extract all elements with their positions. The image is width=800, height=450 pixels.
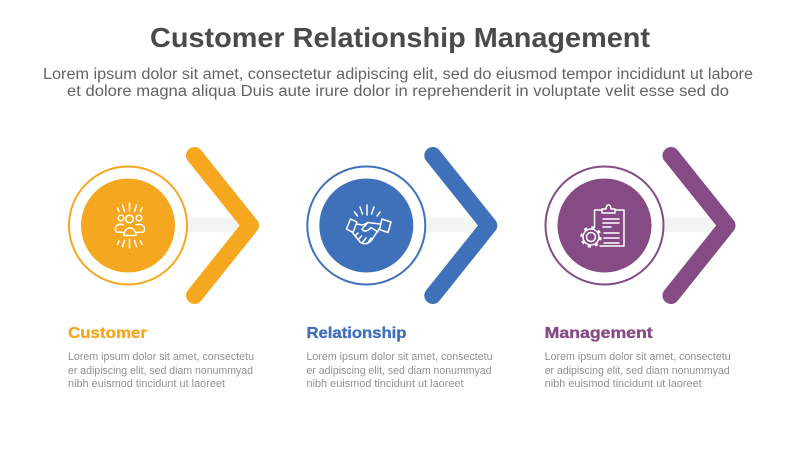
subtitle text block: Lorem ipsum dolor sit amet, consectetur adipiscing elit, sed do eiusmod tempor incididunt ut labore <box>43 66 753 83</box>
inner circle: management <box>558 178 652 272</box>
chevron arrow: relationship <box>433 156 489 296</box>
subtitle text block <box>43 66 753 100</box>
heading: relationship: Relationship <box>306 325 406 342</box>
connector bar: relationship <box>426 218 480 232</box>
text block: relationship: er adipiscing elit, sed diam nonummyad <box>306 365 492 377</box>
outer ring: relationship <box>307 166 425 284</box>
text block: customer: Lorem ipsum dolor sit amet, consectetu <box>68 351 254 363</box>
chevron arrow: management <box>671 156 727 296</box>
text block: relationship: nibh euismod tincidunt ut laoreet <box>306 378 464 390</box>
icon: people group <box>115 203 145 248</box>
connector bar: customer <box>188 218 242 232</box>
title: Customer Relationship Management <box>150 22 650 53</box>
text block: customer: er adipiscing elit, sed diam nonummyad <box>68 365 253 377</box>
text block: management: nibh euismod tincidunt ut laoreet <box>545 378 702 390</box>
inner circle: relationship <box>319 178 413 272</box>
text block: customer <box>68 351 254 390</box>
chevron arrow: customer <box>194 156 250 296</box>
outer ring: management <box>546 166 664 284</box>
heading: customer: Customer <box>68 325 147 342</box>
text block: relationship <box>306 351 493 390</box>
text block: management: Lorem ipsum dolor sit amet, consectetu <box>545 351 731 363</box>
inner circle: customer <box>81 178 175 272</box>
text block: relationship: Lorem ipsum dolor sit amet, consectetu <box>306 351 493 363</box>
outer ring: customer <box>69 166 187 284</box>
heading: management: Management <box>545 325 653 342</box>
panel: management <box>545 156 731 390</box>
panel: customer <box>68 156 254 390</box>
connector bar: management <box>664 218 714 232</box>
subtitle text block: et dolore magna aliqua Duis aute irure dolor in reprehenderit in voluptate velit esse sed do <box>67 83 729 100</box>
icon: handshake <box>346 205 391 244</box>
text block: customer: nibh euismod tincidunt ut laoreet <box>68 378 225 390</box>
icon: clipboard and gear <box>582 205 624 246</box>
text block: management: er adipiscing elit, sed diam nonummyad <box>545 365 730 377</box>
text block: management <box>545 351 731 390</box>
panel: relationship <box>306 156 493 390</box>
